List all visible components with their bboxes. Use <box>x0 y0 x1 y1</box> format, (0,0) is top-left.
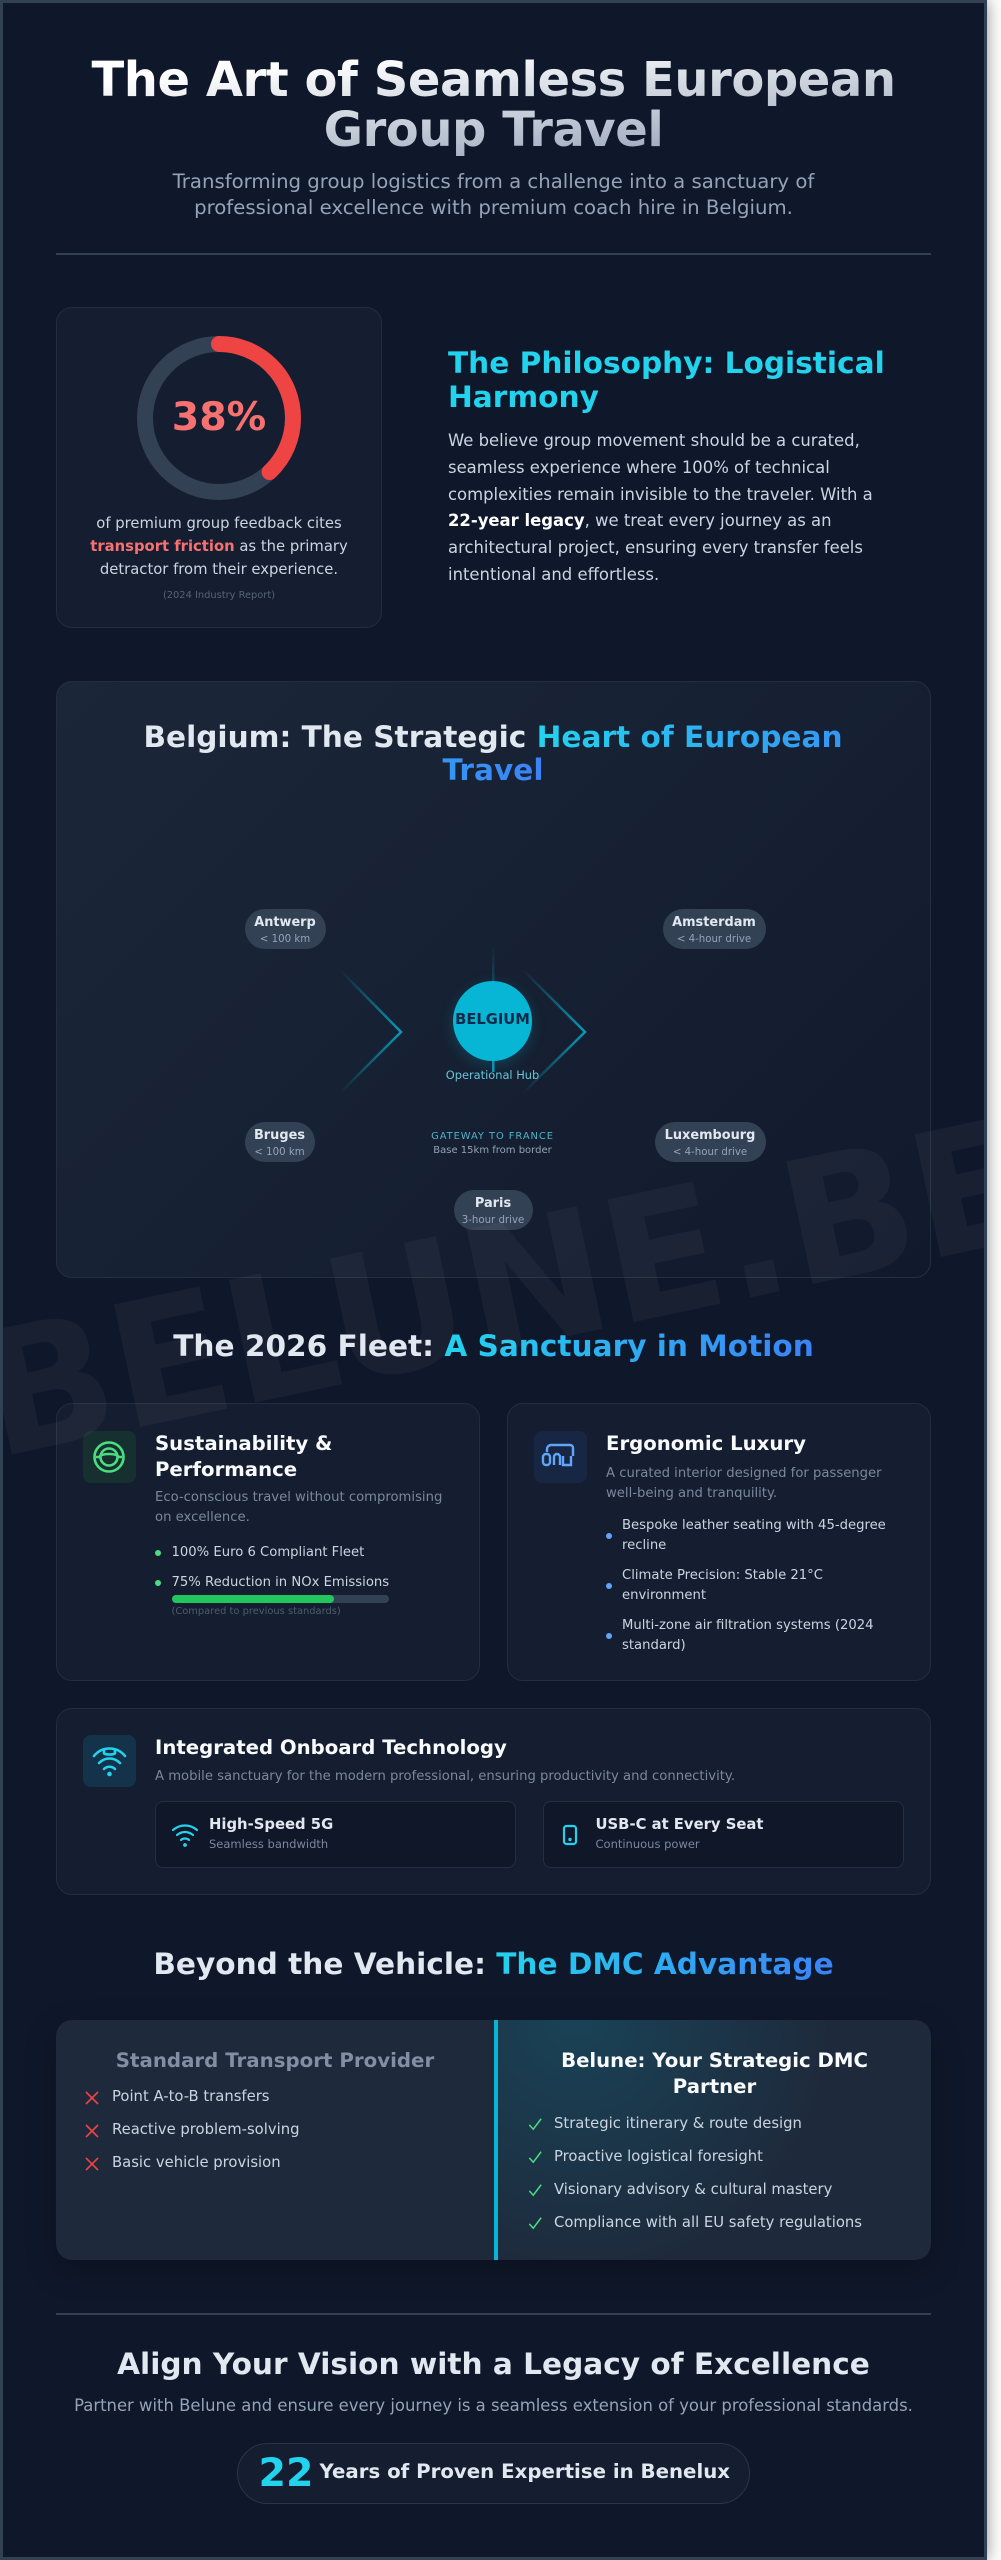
item: Strategic itinerary & route design <box>554 2114 802 2132</box>
item: Reactive problem-solving <box>112 2121 299 2138</box>
card description: Eco-conscious travel without compromising <box>155 1490 442 1505</box>
philosophy paragraph: intentional and effortless. <box>448 565 659 584</box>
progress bar <box>172 1594 388 1602</box>
philosophy paragraph: 22-year legacy, we treat every journey as an <box>448 511 832 530</box>
bullet: NOx: 75% Reduction in NOx Emissions <box>172 1574 389 1590</box>
bullet: seating: recline <box>622 1538 666 1553</box>
bullet: climate: Climate Precision: Stable 21°C <box>622 1568 823 1583</box>
card: sustainability <box>56 1403 480 1681</box>
subtitle: Transforming group logistics from a challenge into a sanctuary of <box>173 170 814 192</box>
panel: comparison <box>56 2020 931 2260</box>
hub: Belgium: BELGIUM <box>455 1010 530 1028</box>
node: Amsterdam <box>662 908 766 948</box>
title <box>91 52 896 158</box>
fleet heading: The 2026 Fleet: A Sanctuary in Motion <box>173 1329 814 1363</box>
DMC heading: Beyond the Vehicle: The DMC Advantage <box>153 1946 834 1980</box>
bullet: air: standard) <box>622 1638 686 1652</box>
node: Antwerp <box>244 908 326 948</box>
card title: Performance <box>155 1458 297 1481</box>
bullet: seating: Bespoke leather seating with 45-degree <box>622 1518 886 1533</box>
subtitle: professional excellence with premium coach hire in Belgium. <box>194 196 793 218</box>
icon: connectivity <box>82 1734 136 1786</box>
column heading: Partner <box>673 2074 756 2098</box>
statistic caption: transport friction as the primary <box>90 538 348 554</box>
card description: on excellence. <box>155 1510 250 1525</box>
feature title: High-Speed 5G <box>209 1816 333 1833</box>
statistic caption <box>90 514 348 578</box>
card description: A curated interior designed for passenger <box>606 1466 882 1480</box>
map heading <box>143 720 843 786</box>
node: Bruges <box>244 1122 314 1162</box>
badge <box>237 2443 750 2504</box>
philosophy paragraph <box>448 431 873 584</box>
philosophy paragraph: architectural project, ensuring every transfer feels <box>448 538 863 557</box>
philosophy paragraph: seamless experience where 100% of technical <box>448 458 830 477</box>
progress note: (Compared to previous standards) <box>172 1606 341 1616</box>
bullet: Euro 6: 100% Euro 6 Compliant Fleet <box>172 1545 364 1560</box>
item: Compliance with all EU safety regulations <box>554 2214 862 2230</box>
philosophy text <box>448 346 885 584</box>
panel: 38% statistic <box>56 307 382 628</box>
item: Visionary advisory & cultural mastery <box>554 2180 832 2198</box>
node: Bruges: Bruges <box>254 1128 305 1142</box>
item: Proactive logistical foresight <box>554 2148 763 2164</box>
feature title: USB-C at Every Seat <box>596 1816 763 1833</box>
column heading: Standard Transport Provider <box>116 2048 434 2072</box>
title: The Art of Seamless European <box>91 52 896 108</box>
bullet: air: Multi-zone air filtration systems (2024 <box>622 1618 874 1632</box>
philosophy paragraph: We believe group movement should be a curated, <box>448 431 860 450</box>
node: Antwerp: Antwerp <box>254 914 316 930</box>
badge number: 22 <box>258 2450 313 2496</box>
bullet: seating <box>606 1518 886 1553</box>
icon: device <box>562 1824 578 1846</box>
statistic value: 38% <box>172 394 266 440</box>
node: Paris: Paris <box>475 1196 511 1210</box>
node: Paris <box>454 1190 532 1230</box>
node: Amsterdam: Amsterdam <box>672 914 756 930</box>
title: Group Travel <box>324 102 663 158</box>
map heading: Travel <box>442 752 544 786</box>
feature subtitle: Seamless bandwidth <box>209 1837 328 1851</box>
hub label: Operational Hub <box>446 1068 539 1082</box>
card description <box>155 1490 442 1525</box>
source note: (2024 Industry Report) <box>163 590 275 601</box>
icon: seat <box>534 1430 586 1482</box>
card description: well-being and tranquility. <box>606 1486 777 1500</box>
card description: A mobile sanctuary for the modern professional, ensuring productivity and connectivity. <box>155 1769 735 1784</box>
card title: Sustainability & <box>155 1432 332 1455</box>
node: Paris: 3-hour drive <box>462 1214 524 1226</box>
feature: USB-C <box>542 1801 904 1868</box>
call to action <box>74 2346 913 2504</box>
feature: 5G <box>155 1801 516 1868</box>
gateway label: GATEWAY TO FRANCE <box>431 1131 554 1142</box>
feature subtitle: Continuous power <box>596 1837 700 1851</box>
node: Antwerp: < 100 km <box>260 934 310 944</box>
column heading <box>561 2048 868 2098</box>
badge text: Years of Proven Expertise in Benelux <box>320 2460 730 2483</box>
gateway sublabel: Base 15km from border <box>433 1144 552 1156</box>
card: onboard technology <box>56 1708 931 1895</box>
statistic caption: detractor from their experience. <box>100 560 338 578</box>
node: Luxembourg: < 4-hour drive <box>673 1146 747 1158</box>
node: Bruges: < 100 km <box>254 1146 305 1158</box>
CTA text: Partner with Belune and ensure every journey is a seamless extension of your professional standards. <box>74 2396 913 2415</box>
icon: steering wheel <box>82 1430 136 1482</box>
CTA heading: Align Your Vision with a Legacy of Excellence <box>117 2346 870 2380</box>
item: Basic vehicle provision <box>112 2154 281 2171</box>
column: standard provider <box>86 2048 434 2171</box>
subtitle <box>172 170 815 218</box>
card title <box>155 1432 332 1481</box>
route lines <box>344 951 587 1090</box>
philosophy heading: The Philosophy: Logistical <box>448 346 885 380</box>
column heading: Belune: Your Strategic DMC <box>561 2048 868 2072</box>
card title: Ergonomic Luxury <box>606 1432 806 1455</box>
node: Amsterdam: < 4-hour drive <box>677 934 751 944</box>
bullet: air <box>606 1618 874 1652</box>
bullet: climate: environment <box>622 1588 706 1603</box>
bullet: climate <box>606 1568 823 1603</box>
philosophy paragraph: complexities remain invisible to the traveler. With a <box>448 485 873 504</box>
node: Luxembourg: Luxembourg <box>665 1128 755 1142</box>
card description <box>606 1466 882 1500</box>
icon: wifi <box>172 1824 198 1847</box>
node: Luxembourg <box>654 1122 766 1162</box>
philosophy heading: Harmony <box>448 380 599 414</box>
statistic caption: of premium group feedback cites <box>96 514 342 532</box>
philosophy heading <box>448 346 885 414</box>
item: Point A-to-B transfers <box>112 2088 270 2105</box>
header <box>91 52 896 218</box>
card title: Integrated Onboard Technology <box>155 1736 507 1759</box>
card: ergonomic luxury <box>507 1403 931 1681</box>
column: Belune <box>494 2020 931 2260</box>
hub: Belgium <box>453 980 532 1060</box>
donut chart <box>137 336 301 500</box>
map heading: Belgium: The Strategic Heart of European <box>143 720 843 754</box>
panel: Belgium map <box>56 681 931 1278</box>
